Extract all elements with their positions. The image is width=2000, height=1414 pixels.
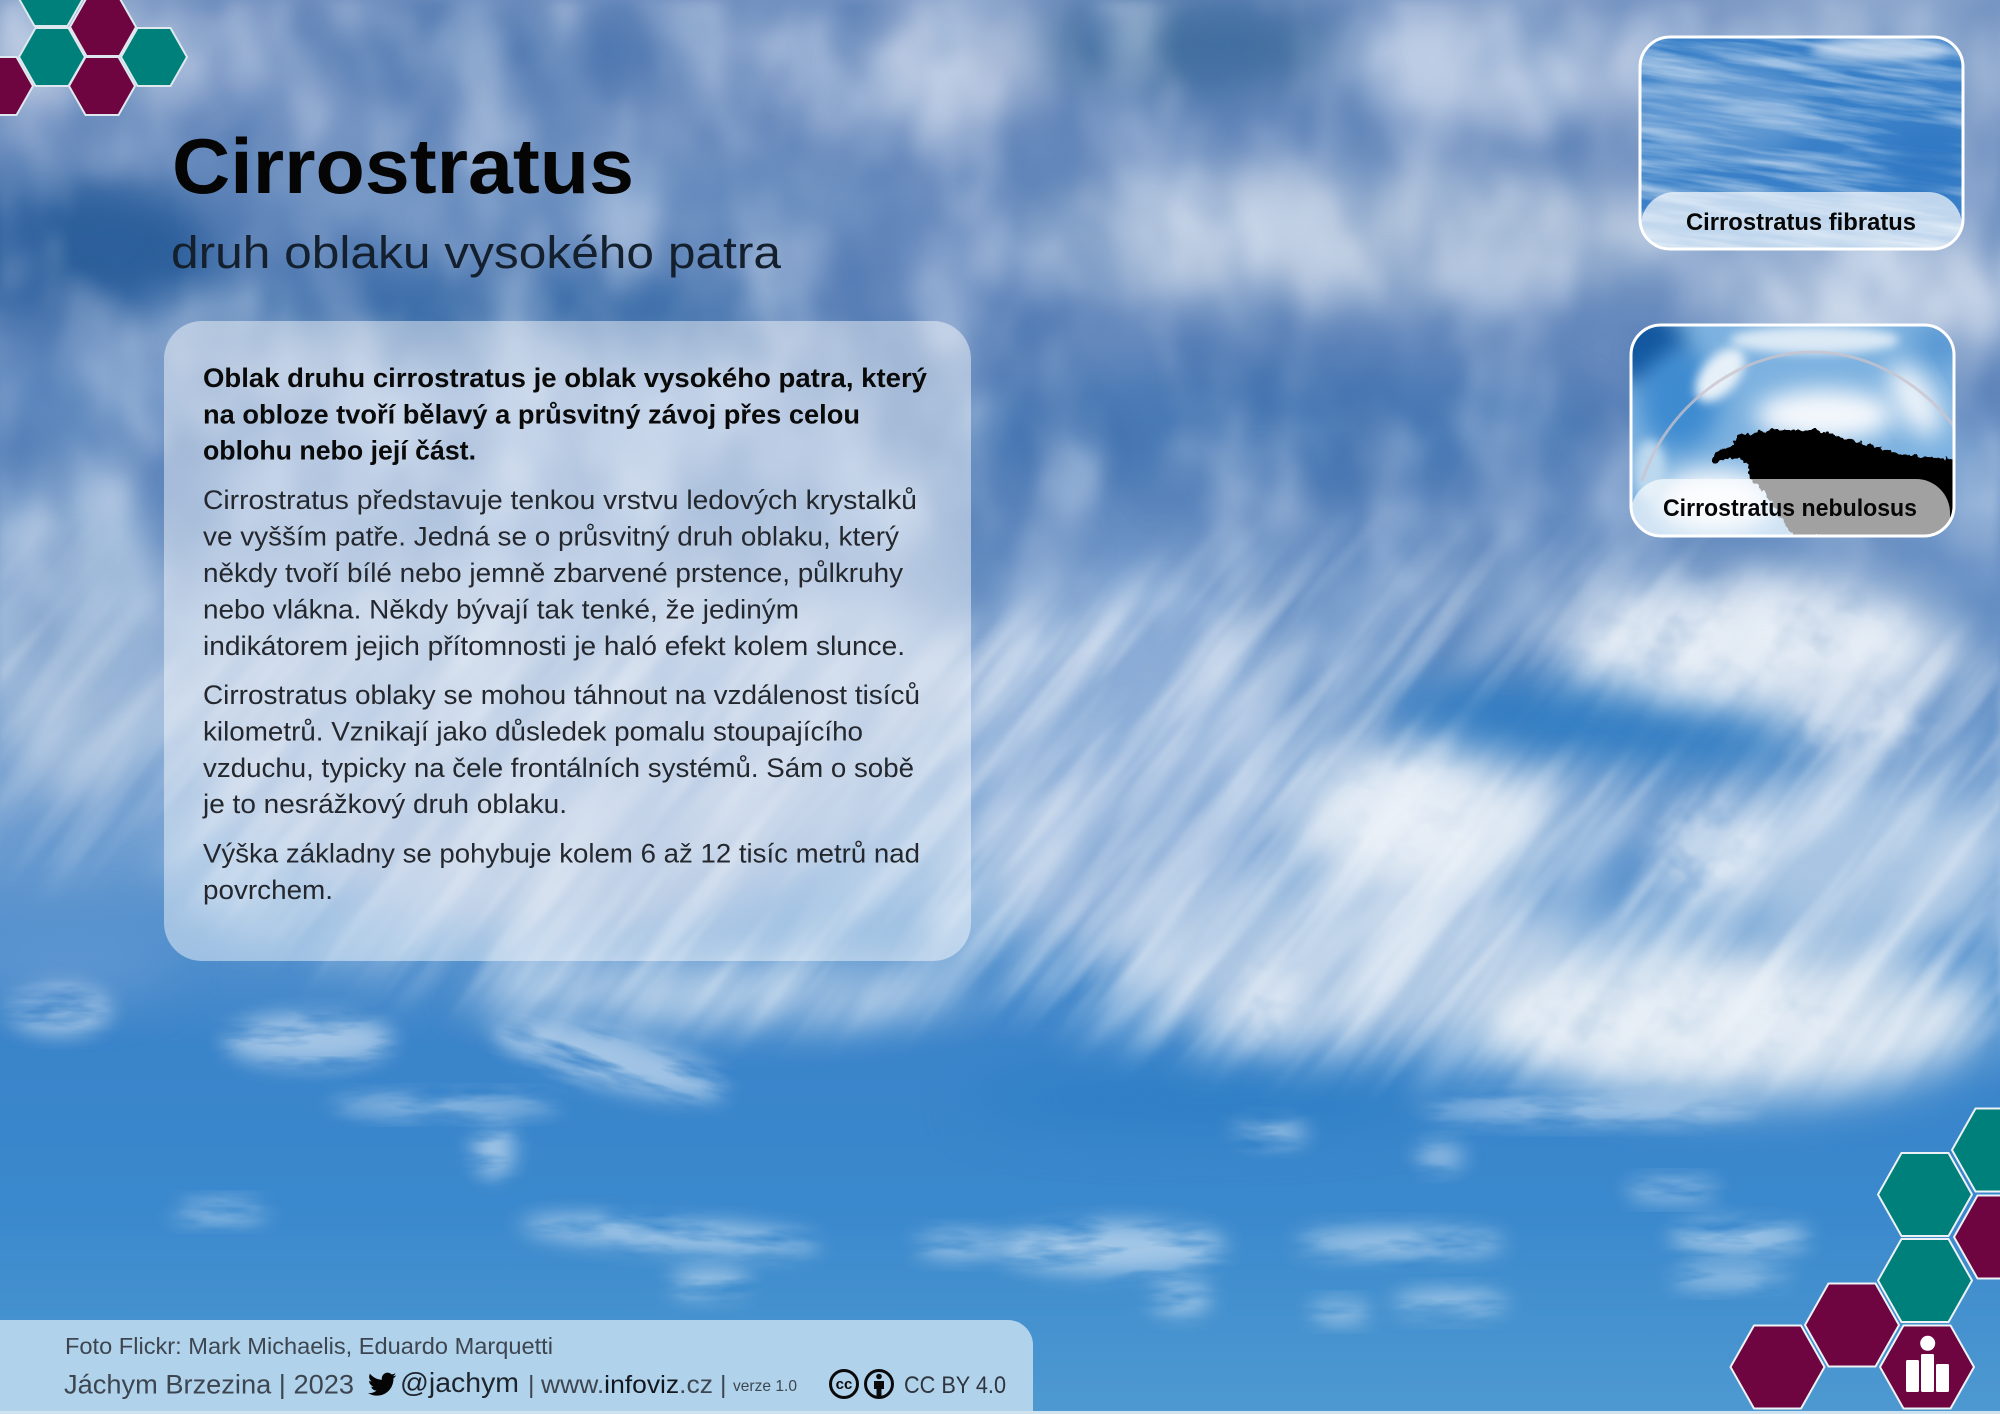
- paragraph: altitude: povrchem.: [203, 875, 333, 905]
- icon: twitter bird: [368, 1373, 396, 1396]
- caption: Cirrostratus fibratus: [1686, 209, 1916, 236]
- twitter handle: @jachym: [400, 1367, 519, 1398]
- licence: CC BY 4.0: [904, 1372, 1006, 1399]
- mottled high cloud texture: [0, 0, 2000, 760]
- icon: creative commons: [830, 1370, 858, 1398]
- paragraph: description: indikátorem jejich přítomnosti je haló efekt kolem slunce.: [203, 631, 905, 661]
- footer panel: [0, 1320, 1033, 1411]
- caption background: [1631, 479, 1950, 537]
- bright cloud clumps: [1240, 590, 1930, 1070]
- sheared cirrus streaks: [0, 528, 2000, 1105]
- paragraph: formation: kilometrů. Vznikají jako důsledek pomalu stoupajícího: [203, 716, 863, 746]
- version: verze 1.0: [733, 1378, 797, 1395]
- paragraph: altitude: Výška základny se pohybuje kolem 6 až 12 tisíc metrů nad: [203, 838, 920, 868]
- tree silhouette: [1712, 430, 1955, 537]
- decorative hexagons: bottom right: [1730, 1108, 2000, 1408]
- paragraph: description: někdy tvoří bílé nebo jemně zbarvené prstence, půlkruhy: [203, 558, 904, 588]
- icon: person and bar chart logo: [1906, 1336, 1949, 1392]
- subtitle: druh oblaku vysokého patra: [171, 227, 782, 278]
- caption background: [1641, 192, 1962, 250]
- lead paragraph: oblohu nebo její část.: [203, 436, 476, 466]
- decorative hexagons: top left: [0, 0, 187, 115]
- paragraph: description: [203, 485, 917, 661]
- lead paragraph: Oblak druhu cirrostratus je oblak vysokého patra, který: [203, 363, 927, 393]
- paragraph: description: nebo vlákna. Někdy bývají tak tenké, že jediným: [203, 594, 799, 624]
- title: Cirrostratus: [172, 122, 634, 210]
- icon: creative commons: cc: [836, 1376, 852, 1393]
- paragraph: description: ve vyšším patře. Jedná se o průsvitný druh oblaku, který: [203, 522, 900, 552]
- lead paragraph: [203, 363, 927, 466]
- paragraph: formation: vzduchu, typicky na čele frontálních systémů. Sám o sobě: [203, 753, 914, 783]
- caption: Cirrostratus nebulosus: [1663, 495, 1917, 522]
- separator: |: [528, 1371, 534, 1399]
- paragraph: formation: je to nesrážkový druh oblaku.: [202, 789, 567, 819]
- photo credit: Foto Flickr: Mark Michaelis, Eduardo Marquetti: [65, 1333, 553, 1359]
- author: Jáchym Brzezina | 2023: [64, 1370, 354, 1400]
- panel: description text: [164, 321, 971, 961]
- halo arc: [1642, 352, 1958, 481]
- icon: attribution: [866, 1370, 892, 1398]
- paragraph: formation: Cirrostratus oblaky se mohou táhnout na vzdálenost tisíců: [203, 680, 920, 710]
- photo card: Cirrostratus fibratus: [1638, 36, 1964, 250]
- website: www.infoviz.cz: [540, 1371, 713, 1399]
- lower wisps: [10, 986, 1810, 1322]
- photo card: Cirrostratus nebulosus: [1595, 307, 1966, 537]
- paragraph: formation: [202, 680, 920, 819]
- paragraph: altitude: [203, 838, 920, 905]
- paragraph: description: Cirrostratus představuje tenkou vrstvu ledových krystalků: [203, 485, 917, 515]
- separator: |: [720, 1371, 726, 1399]
- lead paragraph: na obloze tvoří bělavý a průsvitný závoj přes celou: [203, 400, 860, 430]
